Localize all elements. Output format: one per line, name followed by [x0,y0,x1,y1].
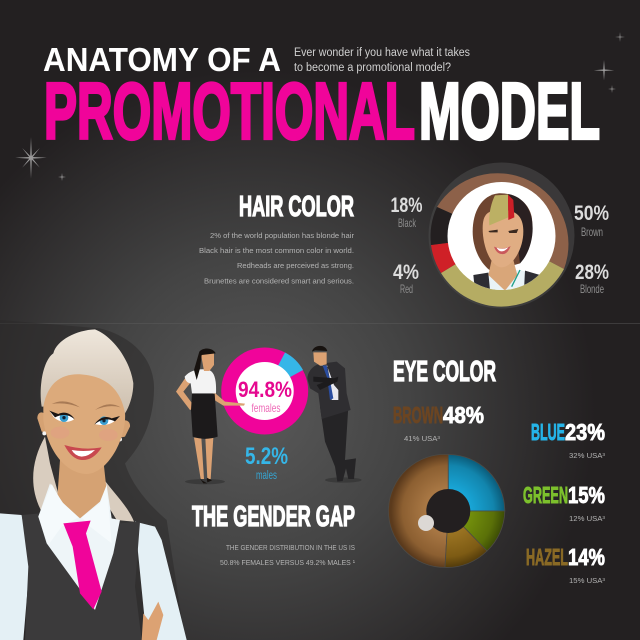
stat: green: 15% [568,482,605,508]
stat: green [523,482,606,523]
face [43,373,125,474]
mouth [64,445,102,460]
hair color facts: Brunettes are considered smart and serious. [204,278,354,286]
subtitle: to become a promotional model? [294,62,451,74]
stat: brown: BROWN [393,402,443,428]
panel: eye color [388,356,606,585]
female percentage: 94.8% [238,377,292,402]
shirt front and collar [38,483,120,610]
stat: brown [393,402,484,443]
hair labels: 28% [575,261,609,284]
male label: males [256,470,277,482]
stat: hazel: HAZEL [526,544,568,570]
hair labels [390,194,609,296]
donut chart: gender [221,348,308,434]
hair labels: Blonde [580,282,604,296]
icon: woman portrait [473,193,542,293]
stat: hazel: 15% USA³ [569,578,606,585]
stat: hazel: 14% [568,544,605,570]
stat: green: 12% USA³ [569,516,606,523]
title word: promotional: PROMOTIONAL [44,66,415,156]
gender gap text: 50.8% FEMALES VERSUS 49.2% MALES ¹ [220,560,356,567]
hair color facts: Redheads are perceived as strong. [237,263,354,270]
hair color facts: Black hair is the most common color in world. [199,248,354,255]
hair labels: 4% [393,261,419,284]
title line: anatomy of a: ANATOMY OF A [43,41,281,78]
gender gap text [220,545,356,567]
hair top [41,329,133,413]
illustration: blonde model [0,320,187,640]
subtitle [294,47,470,74]
eye color heading: EYE COLOR [393,356,496,388]
gender gap heading: THE GENDER GAP [192,501,355,533]
stat: brown: 41% USA³ [404,436,441,443]
hair labels: 18% [390,194,423,217]
eyes [50,412,74,422]
panel: hair color [199,162,609,308]
neck [57,460,108,523]
eye pie chart [388,454,505,567]
sparkles [15,32,625,181]
title [43,41,600,156]
stat: blue: BLUE [531,419,565,445]
hair labels: Red [400,282,413,296]
icon: businessman [307,346,362,483]
model shadow [0,320,185,640]
hair labels: Black [398,216,417,230]
hair donut chart [428,162,574,308]
female label: females [252,401,280,415]
hair labels: 50% [574,202,609,225]
stat: blue [531,419,606,460]
male percentage: 5.2% [245,443,288,470]
hair color heading: HAIR COLOR [239,191,354,223]
hair color facts: 2% of the world population has blonde hair [210,233,355,240]
stat: brown: 48% [443,402,484,428]
subtitle: Ever wonder if you have what it takes [294,47,470,59]
panel: gender gap [176,346,362,567]
stat: blue: 32% USA³ [569,453,606,460]
stat: green: GREEN [523,482,568,508]
ponytail [33,437,134,522]
ears and earrings [37,412,130,438]
gender gap text: THE GENDER DISTRIBUTION IN THE US IS [226,545,355,552]
icon: businesswoman [176,348,245,484]
tie [63,521,102,609]
hair labels: Brown [581,225,603,239]
stat: blue: 23% [565,419,605,445]
vest [22,513,142,640]
cheeks [51,427,69,439]
hair color facts [199,233,355,286]
hand [142,602,163,640]
stat: hazel [526,544,606,585]
shirt sleeves [0,513,187,640]
